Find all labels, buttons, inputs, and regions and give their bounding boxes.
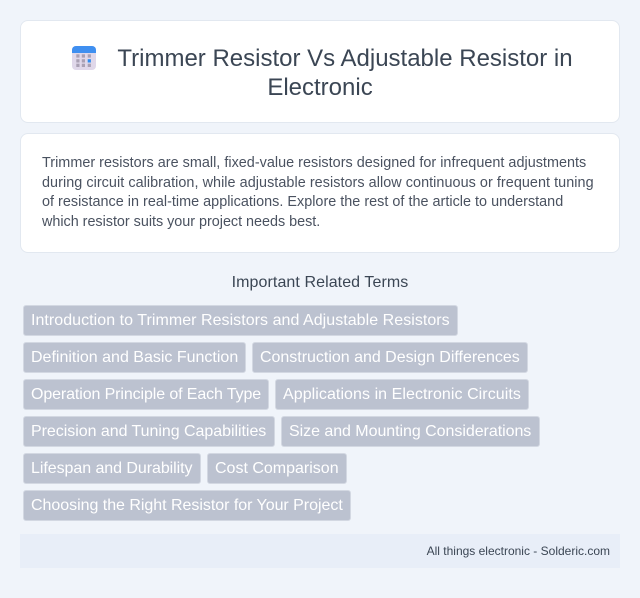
tag xyxy=(23,305,458,336)
tag xyxy=(23,490,351,521)
intro paragraph: Trimmer resistors are small, fixed-value resistors designed for infrequent adjustments xyxy=(42,155,586,171)
tag xyxy=(207,453,347,484)
intro paragraph: of resistance in real-time applications. Explore the rest of the article to understand xyxy=(42,194,563,210)
tag: Cost Comparison xyxy=(215,460,339,477)
intro paragraph: which resistor suits your project needs best. xyxy=(42,214,320,230)
tag xyxy=(23,453,201,484)
tag: Applications in Electronic Circuits xyxy=(283,386,521,403)
footer text: All things electronic - Solderic.com xyxy=(427,544,610,558)
tag: Construction and Design Differences xyxy=(260,349,520,366)
tag: Size and Mounting Considerations xyxy=(289,423,531,440)
title: Electronic xyxy=(267,74,373,101)
intro paragraph: during circuit calibration, while adjustable resistors allow continuous or frequent tuning xyxy=(42,174,594,190)
tag xyxy=(281,416,540,447)
intro text panel xyxy=(20,133,620,253)
tag xyxy=(252,342,528,373)
tag xyxy=(275,379,529,410)
icon: calendar xyxy=(72,46,96,70)
intro paragraph xyxy=(42,155,594,230)
related terms tags xyxy=(23,305,540,521)
title: Trimmer Resistor Vs Adjustable Resistor in xyxy=(117,45,573,72)
section heading: Important Related Terms xyxy=(232,274,408,291)
tag: Lifespan and Durability xyxy=(31,460,193,477)
tag xyxy=(23,342,246,373)
header panel xyxy=(20,20,620,123)
tag: Introduction to Trimmer Resistors and Adjustable Resistors xyxy=(31,312,450,329)
tag xyxy=(23,416,275,447)
title xyxy=(117,45,573,101)
tag: Definition and Basic Function xyxy=(31,349,238,366)
tag: Choosing the Right Resistor for Your Project xyxy=(31,497,343,514)
footer bar xyxy=(20,534,620,568)
tag: Operation Principle of Each Type xyxy=(31,386,261,403)
tag: Precision and Tuning Capabilities xyxy=(31,423,266,440)
tag xyxy=(23,379,269,410)
